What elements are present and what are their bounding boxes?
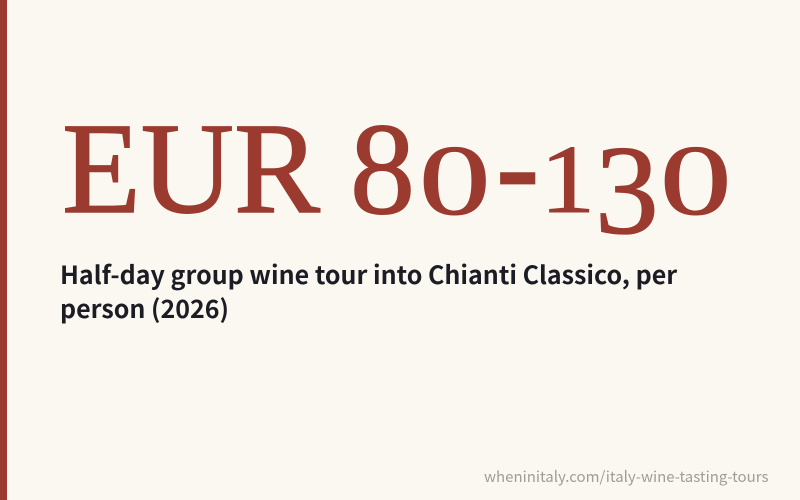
subtitle <box>60 256 678 326</box>
headline figure: 1 <box>540 125 595 234</box>
headline figure: 0 <box>660 125 731 236</box>
headline figure: 3 <box>595 119 659 261</box>
headline figure: - <box>496 84 539 243</box>
headline figure: 0 <box>419 125 490 236</box>
headline figure: EUR <box>62 97 320 241</box>
subtitle: person (2026) <box>60 290 229 326</box>
source url: wheninitaly.com/italy-wine-tasting-tours <box>484 466 768 487</box>
headline figure: 8 <box>350 97 415 242</box>
subtitle: Half-day group wine tour into Chianti Classico, per <box>60 256 677 292</box>
accent bar <box>0 0 7 500</box>
